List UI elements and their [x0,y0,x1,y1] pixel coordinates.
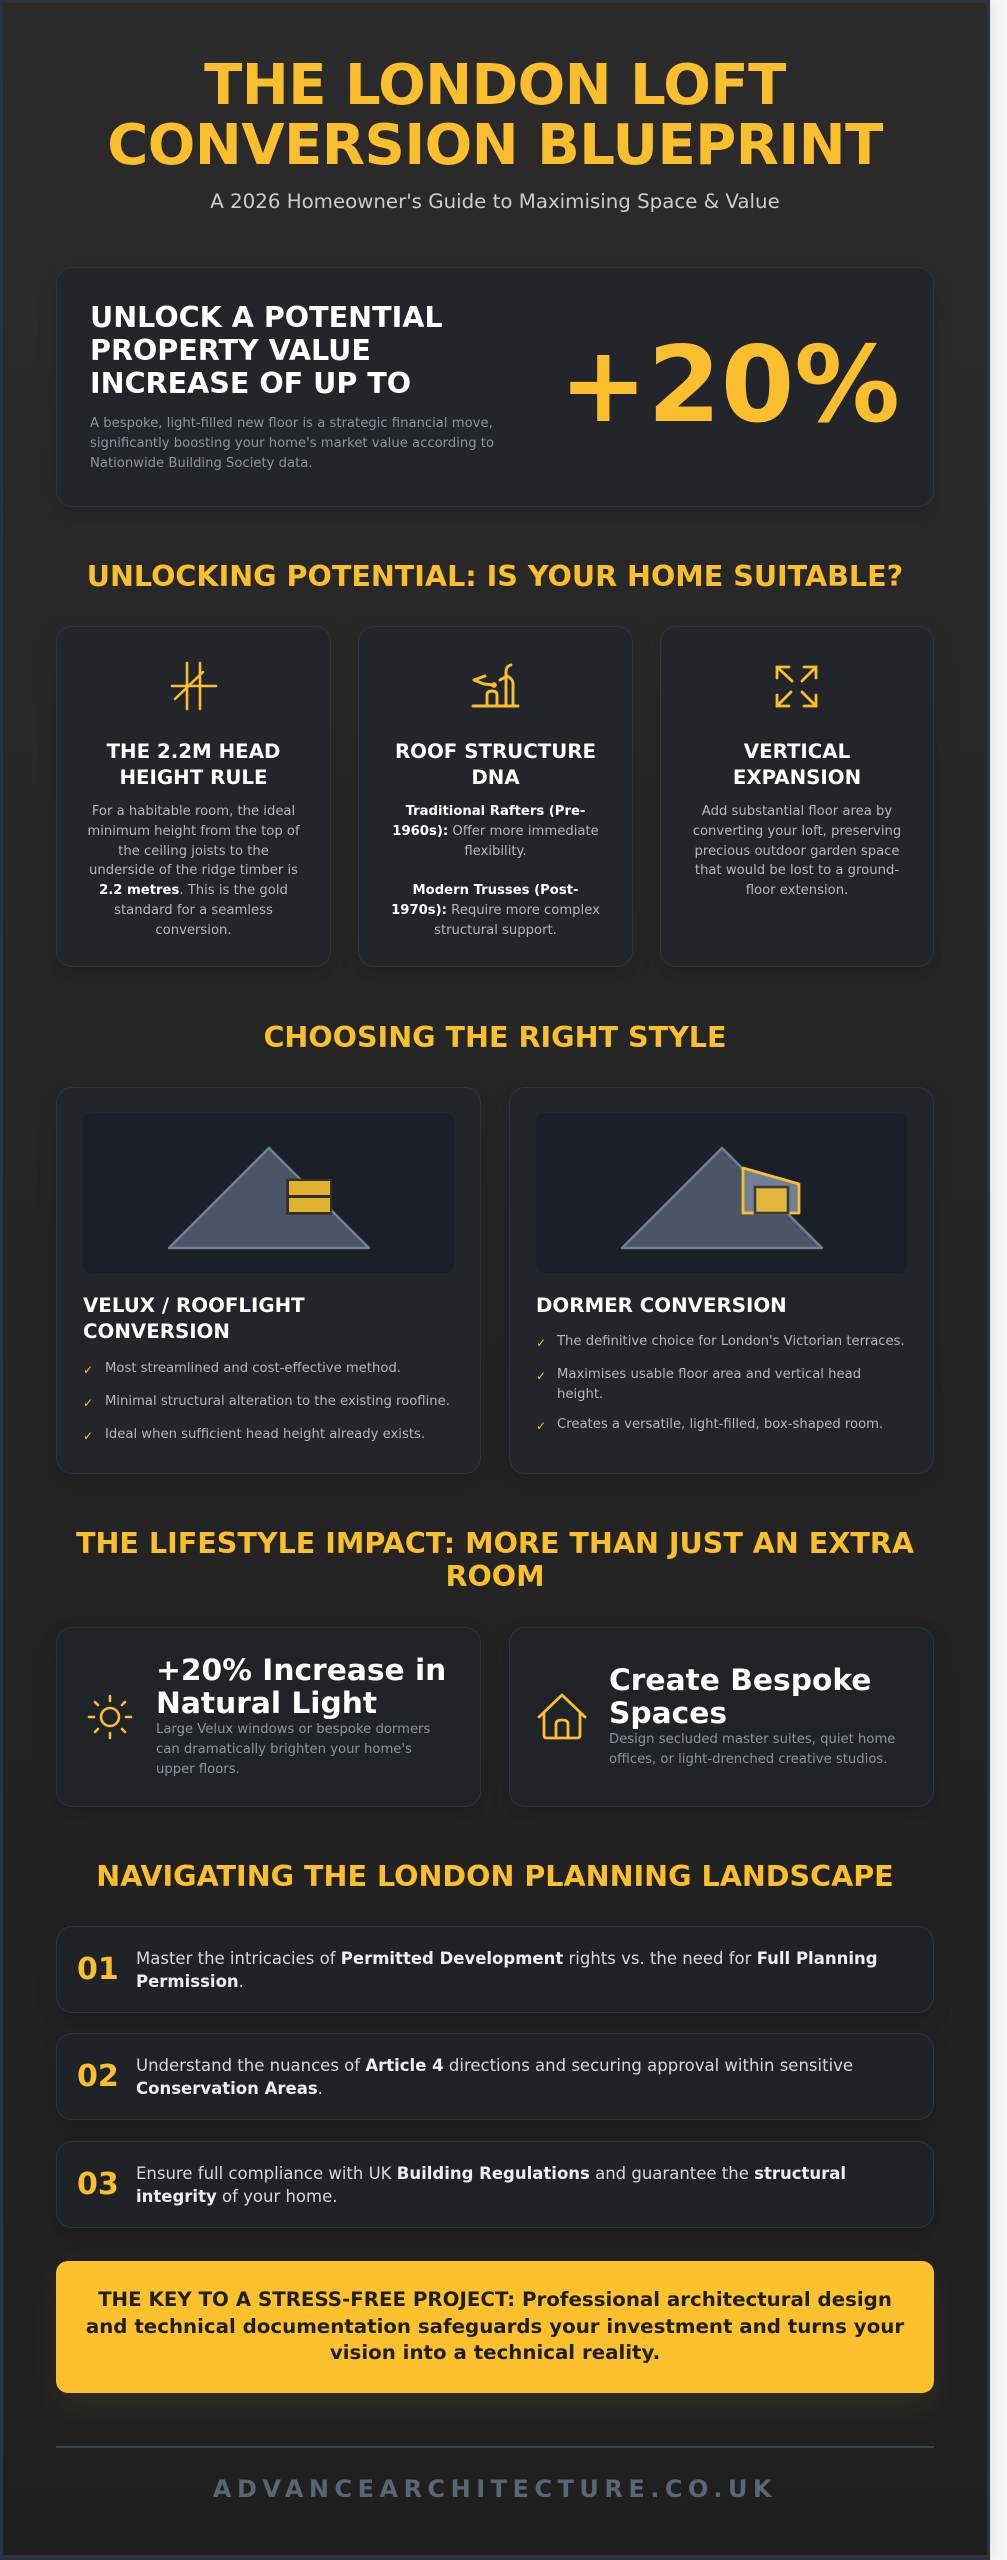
bullet text: height. [557,1387,603,1402]
card body: that would be lost to a ground- [695,863,899,878]
step number: 03 [77,2167,119,2202]
bullet check: ✓ [536,1369,546,1383]
panel: vertical expansion [660,626,934,967]
panel: dormer conversion [509,1087,934,1474]
panel: velux conversion [56,1087,481,1474]
step text: Understand the nuances of Article 4 directions and securing approval within sensitive [136,2056,853,2074]
panel: planning step 3 [56,2141,934,2228]
callout text: and technical documentation safeguards your investment and turns your [86,2314,904,2338]
card body: floor extension. [746,883,848,898]
card title: DORMER CONVERSION [536,1294,787,1316]
bullet check: ✓ [536,1419,546,1433]
bullet text: Ideal when sufficient head height already exists. [105,1427,425,1442]
step text [136,1948,878,1990]
footer website: ADVANCEARCHITECTURE.CO.UK [213,2474,777,2502]
callout text [86,2288,904,2364]
panel: bespoke spaces [509,1627,934,1807]
card body: standard for a seamless [114,903,273,918]
card title: VELUX / ROOFLIGHT [83,1294,305,1316]
icon: roof structure [472,664,520,708]
icon: expand arrows [776,666,818,708]
step text: Conservation Areas. [136,2078,323,2098]
callout text: vision into a technical reality. [330,2341,660,2364]
card title: CONVERSION [83,1320,230,1343]
step number: 01 [77,1952,119,1987]
panel: head height rule [56,626,331,967]
lifestyle title: Natural Light [156,1686,377,1720]
lifestyle title: Spaces [609,1696,727,1730]
callout: key to a stress-free project [56,2261,934,2393]
card title: HEIGHT RULE [119,766,268,789]
panel: natural light [56,1627,481,1807]
step text: Master the intricacies of Permitted Development rights vs. the need for Full Planning [136,1948,878,1968]
card title: THE 2.2M HEAD [107,740,280,763]
card body: Add substantial floor area by [702,804,892,819]
lifestyle title [156,1652,446,1720]
lifestyle title: Create Bespoke [609,1662,871,1698]
card body [391,804,600,938]
card title [395,740,596,789]
card title [106,740,280,789]
hero description: A bespoke, light-filled new floor is a strategic financial move, [90,416,493,431]
big stat: +20%: +20% [559,323,900,446]
card body: 2.2 metres. This is the gold [99,883,288,898]
hero description: significantly boosting your home's market value according to [90,436,494,451]
callout text: THE KEY TO A STRESS-FREE PROJECT: Professional architectural design [98,2288,892,2311]
illustration: dormer roof [536,1113,907,1273]
step text: Ensure full compliance with UK Building Regulations and guarantee the structural [136,2164,846,2182]
heading: unlocking potential: UNLOCKING POTENTIAL: IS YOUR HOME SUITABLE? [87,559,903,593]
bullet text: Creates a versatile, light-filled, box-shaped room. [557,1417,883,1432]
lifestyle description: offices, or light-drenched creative studios. [609,1752,887,1767]
heading: lifestyle impact [76,1526,914,1592]
title: CONVERSION BLUEPRINT [107,113,883,178]
card body: converting your loft, preserving [693,824,901,839]
panel: planning step 2 [56,2033,934,2120]
panel: roof structure DNA [358,626,633,967]
card body: underside of the ridge timber is [89,863,298,878]
card title: VERTICAL [744,740,850,763]
lifestyle description [156,1722,430,1777]
icon: house [538,1694,586,1740]
card body: Traditional Rafters (Pre- [406,804,585,819]
card body: precious outdoor garden space [694,844,900,859]
card body: conversion. [155,923,232,938]
bullet text: Maximises usable floor area and vertical head [557,1367,861,1382]
hero heading: PROPERTY VALUE [90,332,371,366]
illustration: velux roof [83,1113,454,1273]
subtitle: A 2026 Homeowner's Guide to Maximising Space & Value [210,190,780,212]
step text [136,2164,846,2206]
hero heading: UNLOCK A POTENTIAL [90,300,443,334]
step number: 02 [77,2059,119,2094]
card body: 1970s): Require more complex [391,903,600,918]
heading: lifestyle impact: THE LIFESTYLE IMPACT: MORE THAN JUST AN EXTRA [76,1526,914,1560]
lifestyle title: +20% Increase in [156,1652,446,1688]
card body: flexibility. [464,844,527,859]
bullet text: Minimal structural alteration to the existing roofline. [105,1394,450,1409]
bullet text [557,1367,861,1402]
step text: Permission. [136,1972,244,1990]
card title [733,740,861,789]
panel: planning step 1 [56,1926,934,2013]
hero description [90,416,494,471]
card body: minimum height from the top of [87,824,300,839]
icon: head height [170,662,218,710]
bullet check: ✓ [83,1396,93,1410]
hero heading: INCREASE OF UP TO [90,366,411,400]
bullet check: ✓ [83,1429,93,1443]
title: THE LONDON LOFT [204,53,786,118]
card body: For a habitable room, the ideal [92,804,295,819]
step text: integrity of your home. [136,2186,338,2206]
heading: choosing the right style: CHOOSING THE RIGHT STYLE [263,1020,727,1054]
icon: sun [88,1694,132,1740]
lifestyle title [609,1662,871,1730]
card body: Modern Trusses (Post- [413,883,578,898]
card title: DNA [471,766,520,789]
card title: EXPANSION [733,766,861,789]
hero description: Nationwide Building Society data. [90,456,313,471]
bullet text: Most streamlined and cost-effective method. [105,1361,401,1376]
lifestyle description: Design secluded master suites, quiet home [609,1732,895,1747]
heading: lifestyle impact: ROOM [445,1558,545,1592]
lifestyle description: can dramatically brighten your home's [156,1742,412,1757]
bullet check: ✓ [83,1363,93,1377]
bullet text: The definitive choice for London's Victorian terraces. [557,1334,905,1349]
title [107,53,884,178]
lifestyle description: upper floors. [156,1762,240,1777]
hero heading [90,300,443,400]
card body: 1960s): Offer more immediate [392,824,599,839]
card body [87,804,300,938]
lifestyle description [609,1732,895,1767]
card body: the ceiling joists to the [118,844,269,859]
card body [693,804,901,898]
card title: ROOF STRUCTURE [395,740,596,763]
panel: value increase hero [56,267,934,507]
card body: structural support. [434,923,557,938]
heading: planning landscape: NAVIGATING THE LONDON PLANNING LANDSCAPE [96,1858,894,1892]
card title [83,1294,305,1343]
step text [136,2056,853,2098]
bullet check: ✓ [536,1336,546,1350]
lifestyle description: Large Velux windows or bespoke dormers [156,1722,430,1737]
